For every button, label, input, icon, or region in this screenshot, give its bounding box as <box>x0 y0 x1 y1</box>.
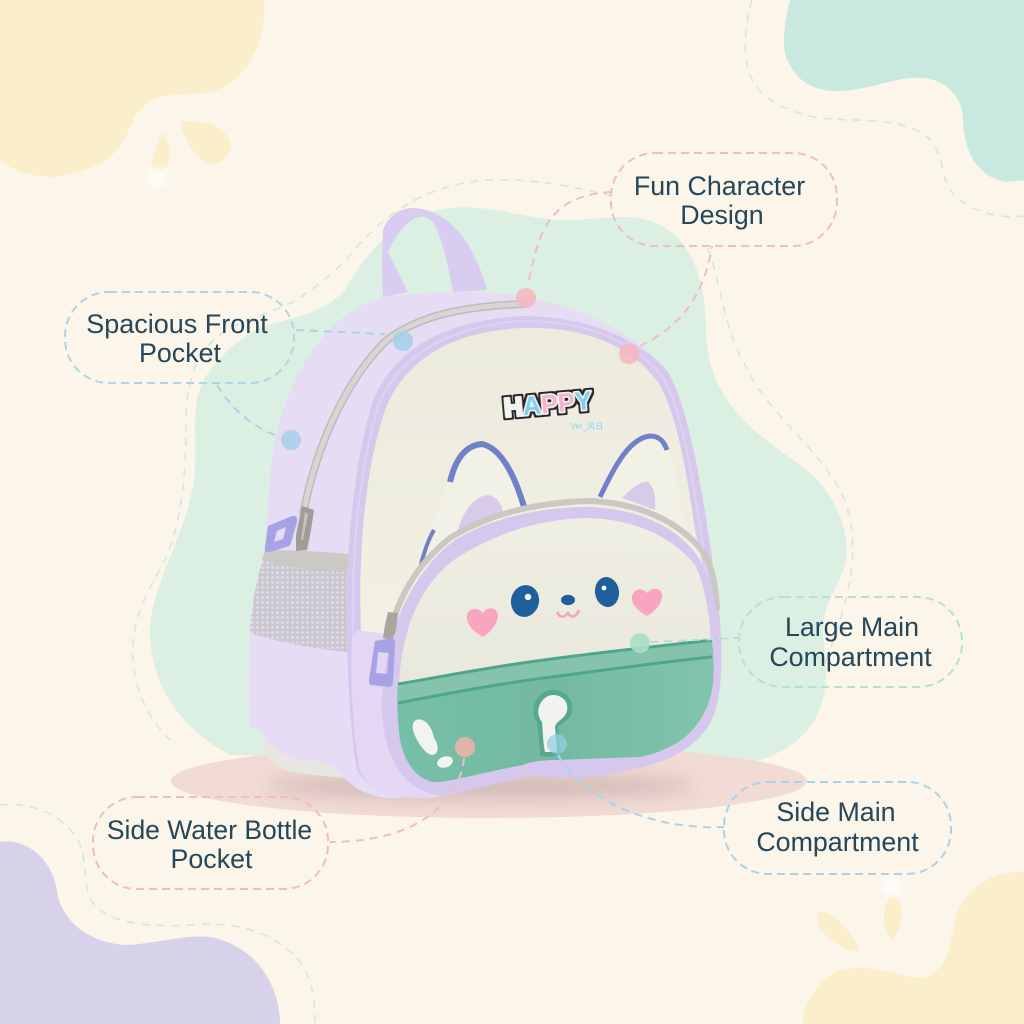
pocket zipper pull <box>369 612 398 687</box>
front panel highlight <box>353 321 712 640</box>
callout: Large Main Compartment <box>739 597 962 687</box>
callout: Side Main Compartment: Compartment <box>756 827 919 857</box>
background blob: bottom left lavender <box>0 842 280 1024</box>
right eye <box>593 575 621 609</box>
main zipper pull <box>265 506 314 552</box>
face <box>467 575 662 637</box>
callout dots <box>281 288 650 757</box>
callout: Fun Character Design: Fun Character <box>634 171 805 201</box>
callout: Spacious Front Pocket <box>65 292 294 383</box>
left eye <box>508 582 542 620</box>
callout: Side Main Compartment <box>724 782 951 874</box>
callout connectors <box>217 192 738 842</box>
nose <box>561 595 575 605</box>
decorative drops: bottom right <box>817 897 902 951</box>
background blob: top left yellow <box>0 0 264 177</box>
front panel piping <box>347 316 721 797</box>
callout: Spacious Front Pocket: Spacious Front <box>86 309 268 339</box>
green band light <box>398 640 712 702</box>
paw icon <box>413 719 454 770</box>
central mint blob <box>150 207 847 765</box>
pocket zipper <box>392 501 717 625</box>
decorative drops: top left <box>152 122 231 176</box>
side body <box>249 292 718 798</box>
lower front side <box>351 630 440 798</box>
callout: Side Water Bottle Pocket: Pocket <box>171 844 253 874</box>
backpack <box>249 208 721 798</box>
left heart <box>467 608 498 637</box>
left ear <box>420 444 530 566</box>
callout: Large Main Compartment: Large Main <box>785 612 919 642</box>
front cream panel <box>360 328 720 650</box>
logo: HAPPY: HAPPY <box>503 387 593 423</box>
green stripes <box>398 640 712 703</box>
background blob: top right mint <box>784 0 1024 182</box>
callout: Side Water Bottle Pocket <box>93 797 328 889</box>
right ear <box>598 435 684 530</box>
floor shadow <box>171 744 807 818</box>
mesh bottle pocket <box>250 555 357 652</box>
callout: Side Main Compartment: Side Main <box>776 797 896 827</box>
lower side pouch <box>249 633 347 777</box>
front pocket piping <box>382 507 720 795</box>
mesh band <box>262 550 357 572</box>
grey foot <box>261 728 345 778</box>
callout: Fun Character Design <box>611 153 837 246</box>
callout: Fun Character Design: Design <box>680 200 764 230</box>
mouth <box>557 610 579 617</box>
decorative glow: top left <box>142 163 172 193</box>
pocket cream <box>399 518 711 690</box>
shadow under bag <box>265 773 695 799</box>
right heart <box>632 589 662 616</box>
callout: Spacious Front Pocket: Pocket <box>139 338 222 368</box>
top handle <box>382 208 487 297</box>
callout: Large Main Compartment: Compartment <box>769 642 932 672</box>
small logo subtext: Ver_风日 <box>571 422 603 431</box>
background blob: bottom right yellow <box>802 872 1024 1024</box>
zipper: main <box>303 304 525 515</box>
callout: Side Water Bottle Pocket: Side Water Bottle <box>107 815 312 845</box>
keyhole icon <box>533 690 572 757</box>
green panel <box>397 640 714 782</box>
decorative glow: bottom right <box>876 871 906 901</box>
